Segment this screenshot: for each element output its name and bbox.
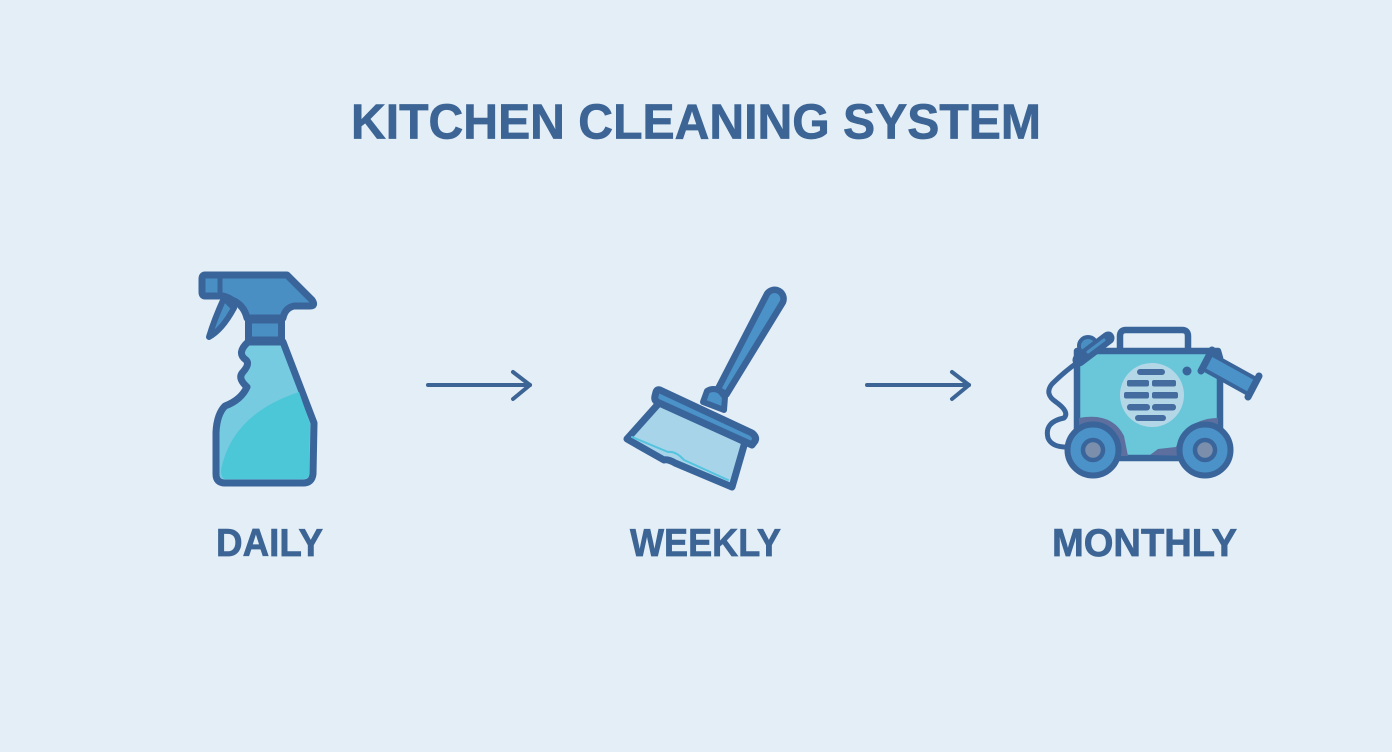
- label: monthly: MONTHLY: [1052, 522, 1237, 565]
- bristles: [627, 402, 745, 487]
- wheel left: [1068, 424, 1118, 476]
- icon: brush: [627, 290, 784, 487]
- bottle body: [216, 342, 314, 483]
- indicator dot: [1182, 366, 1192, 376]
- wheel right: [1180, 424, 1230, 476]
- arrow: weekly to monthly: [867, 372, 969, 399]
- label: weekly: WEEKLY: [630, 522, 781, 565]
- carry handle: [1120, 330, 1188, 350]
- machine body: [1077, 351, 1220, 458]
- wheel arches: [1079, 417, 1128, 456]
- nozzle right: [1201, 350, 1259, 397]
- vent: [1120, 363, 1184, 427]
- label: daily: DAILY: [216, 522, 323, 565]
- icon: machine: [1047, 330, 1259, 476]
- nozzle divider: [218, 276, 222, 295]
- spray head: [202, 275, 314, 318]
- icon: spray bottle: [202, 275, 314, 483]
- bristle edge: [632, 437, 728, 480]
- handle: [718, 290, 784, 394]
- hose: [1047, 362, 1078, 447]
- liquid: [221, 392, 310, 479]
- trigger: [209, 298, 234, 337]
- brush head: [655, 390, 756, 445]
- arrow: daily to weekly: [428, 372, 530, 399]
- nozzle left: [1079, 337, 1108, 360]
- collar: [248, 320, 282, 340]
- neck: [703, 389, 725, 410]
- title: KITCHEN CLEANING SYSTEM: [351, 96, 1041, 150]
